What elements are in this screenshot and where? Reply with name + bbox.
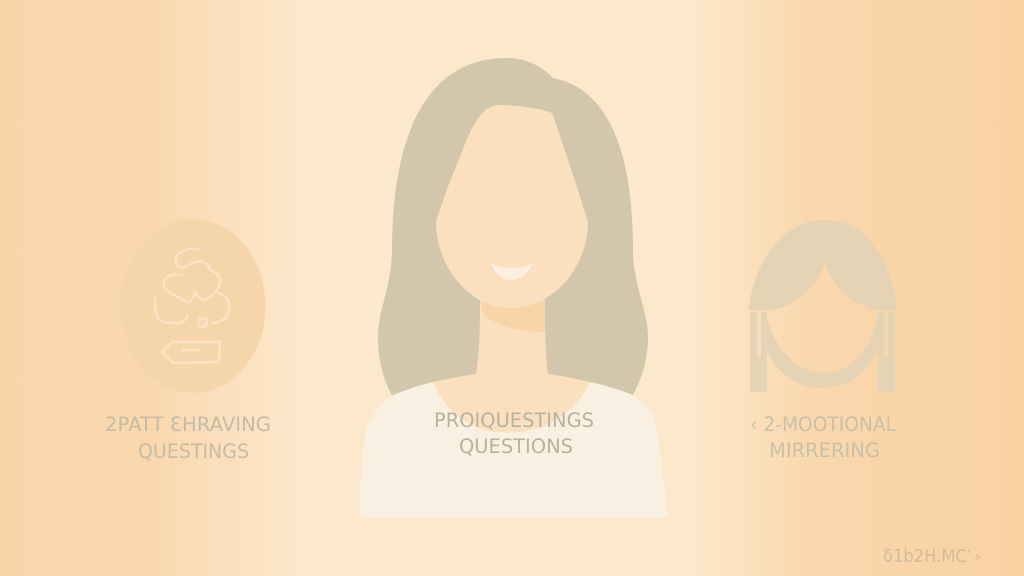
neck shadow xyxy=(480,298,545,332)
right label: ‹ 2-MOOTIONAL xyxy=(750,413,896,436)
face xyxy=(436,105,588,308)
center label xyxy=(434,409,594,458)
hair cap xyxy=(749,220,897,311)
chin crescent xyxy=(766,313,878,388)
right label xyxy=(750,413,896,462)
footer mark: δ1b2H.MC’ xyxy=(883,546,972,567)
left label: QUESTINGS xyxy=(138,440,249,463)
center label: QUESTIONS xyxy=(459,435,573,458)
left label: 2PATT ƐHRAVING xyxy=(105,413,271,436)
center figure: woman portrait xyxy=(360,58,667,518)
left label xyxy=(105,413,271,463)
right label: MIRRERING xyxy=(769,439,880,462)
smile xyxy=(491,263,533,280)
footer mark: › xyxy=(975,549,981,565)
center label: PROIQUESTINGS xyxy=(434,409,594,432)
hair xyxy=(378,58,648,395)
cloud and tag line icon xyxy=(155,249,229,363)
left icon: thought cloud in oval xyxy=(120,219,266,393)
right icon: hair silhouette mirror xyxy=(749,220,897,392)
shirt xyxy=(360,382,667,518)
left tassel xyxy=(750,312,767,392)
neck xyxy=(433,290,590,432)
oval badge xyxy=(120,219,266,393)
right tassel xyxy=(878,312,895,392)
